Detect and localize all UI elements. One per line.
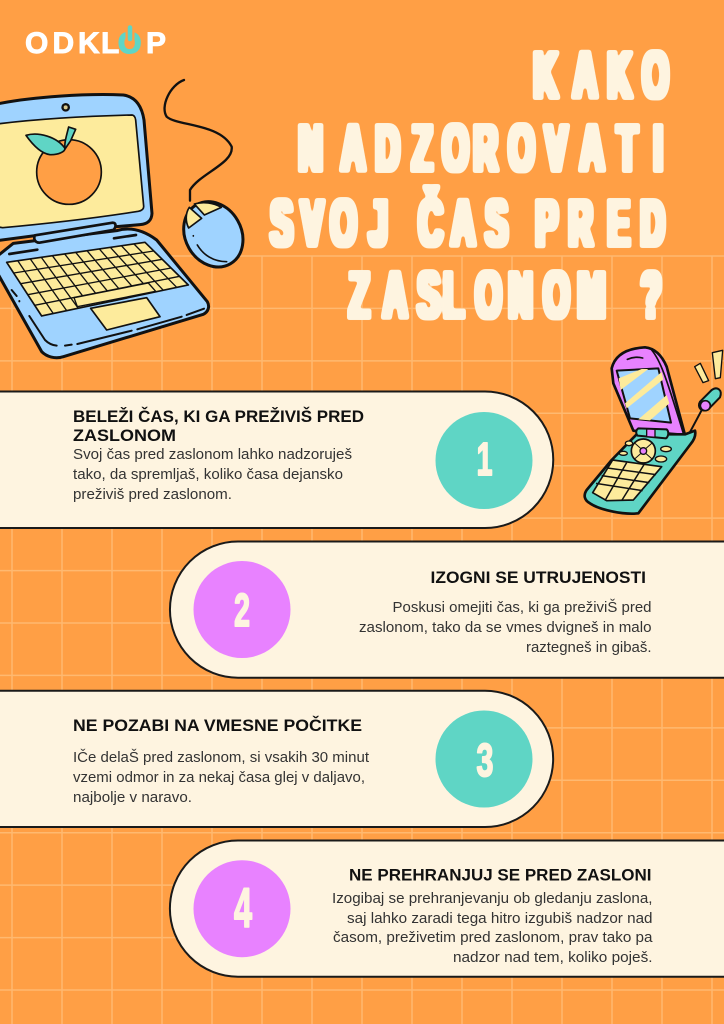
- number badge 4: [194, 860, 290, 957]
- number badge 3: [436, 710, 532, 808]
- heading: tip 1: BELEŽI ČAS, KI GA PREŽIVIŠ PRED: [73, 407, 364, 426]
- text: tip 2 body: raztegneš in gibaš.: [526, 640, 652, 656]
- heading: tip 1: ZASLONOM: [73, 426, 176, 445]
- title: SVOJ ČAS PRED: [270, 184, 665, 261]
- text: tip 4 body: časom, preživetim pred zaslonom, prav tako pa: [333, 930, 653, 946]
- number badge 2: [194, 561, 290, 658]
- number badge 4: 4: [234, 877, 252, 939]
- panel: tip 3: [0, 691, 553, 827]
- text: tip 3 body: vzemi odmor in za nekaj časa glej v daljavo,: [73, 770, 365, 786]
- number badge 3: 3: [477, 736, 493, 787]
- text: tip 3 body: IČe delaŠ pred zaslonom, si vsakih 30 minut: [73, 749, 369, 766]
- logo: ODKLOP: ODKLOP: [25, 27, 166, 60]
- heading: tip 1: [73, 407, 364, 445]
- icon: flip phone: [585, 347, 723, 514]
- panel: tip 1: [0, 392, 553, 528]
- text: tip 3 body: [73, 749, 369, 806]
- phone antenna: [689, 388, 721, 433]
- title: KAKO: [534, 39, 669, 113]
- number badge 1: 1: [477, 434, 492, 486]
- text: tip 4 body: nadzor nad tem, koliko poješ.: [453, 950, 652, 966]
- phone base: [585, 428, 695, 514]
- text: tip 1 body: tako, da spremljaš, koliko časa dejansko: [73, 467, 343, 483]
- title: ZASLONOM ?: [349, 259, 661, 333]
- laptop base: [0, 229, 209, 358]
- text: tip 1 body: Svoj čas pred zaslonom lahko nadzoruješ: [73, 447, 352, 463]
- text: tip 1 body: preživiš pred zaslonom.: [73, 487, 232, 503]
- heading: tip 3: NE POZABI NA VMESNE POČITKE: [73, 716, 362, 735]
- text: tip 4 body: saj lahko zaradi tega hitro izgubiš nadzor nad: [347, 911, 652, 927]
- title: [270, 39, 669, 333]
- text: tip 2 body: [359, 599, 652, 656]
- phone lid: [612, 347, 685, 435]
- panel: tip 4: [170, 840, 724, 977]
- number badge 1: [436, 412, 532, 509]
- text: tip 4 body: Izogibaj se prehranjevanju ob gledanju zaslona,: [332, 891, 652, 907]
- text: tip 3 body: najbolje v naravo.: [73, 790, 192, 806]
- number badge 2: 2: [234, 585, 250, 637]
- icon: mouse cord: [165, 80, 232, 201]
- title: NADZOROVATI: [298, 112, 663, 186]
- heading: tip 2: IZOGNI SE UTRUJENOSTI: [430, 568, 646, 587]
- icon: computer mouse: [172, 191, 255, 278]
- icon: orange on screen: [26, 127, 101, 204]
- laptop lid: [0, 95, 152, 243]
- text: tip 1 body: [73, 447, 352, 503]
- text: tip 4 body: [332, 891, 653, 966]
- text: tip 2 body: zaslonom, tako da se vmes dvigneš in malo: [359, 620, 652, 636]
- icon: laptop with mouse: [0, 80, 255, 358]
- panel: tip 2: [170, 542, 724, 678]
- heading: tip 4: NE PREHRANJUJ SE PRED ZASLONI: [349, 866, 652, 884]
- text: tip 2 body: Poskusi omejiti čas, ki ga preživiŠ pred: [392, 599, 652, 616]
- signal marks: [695, 350, 723, 383]
